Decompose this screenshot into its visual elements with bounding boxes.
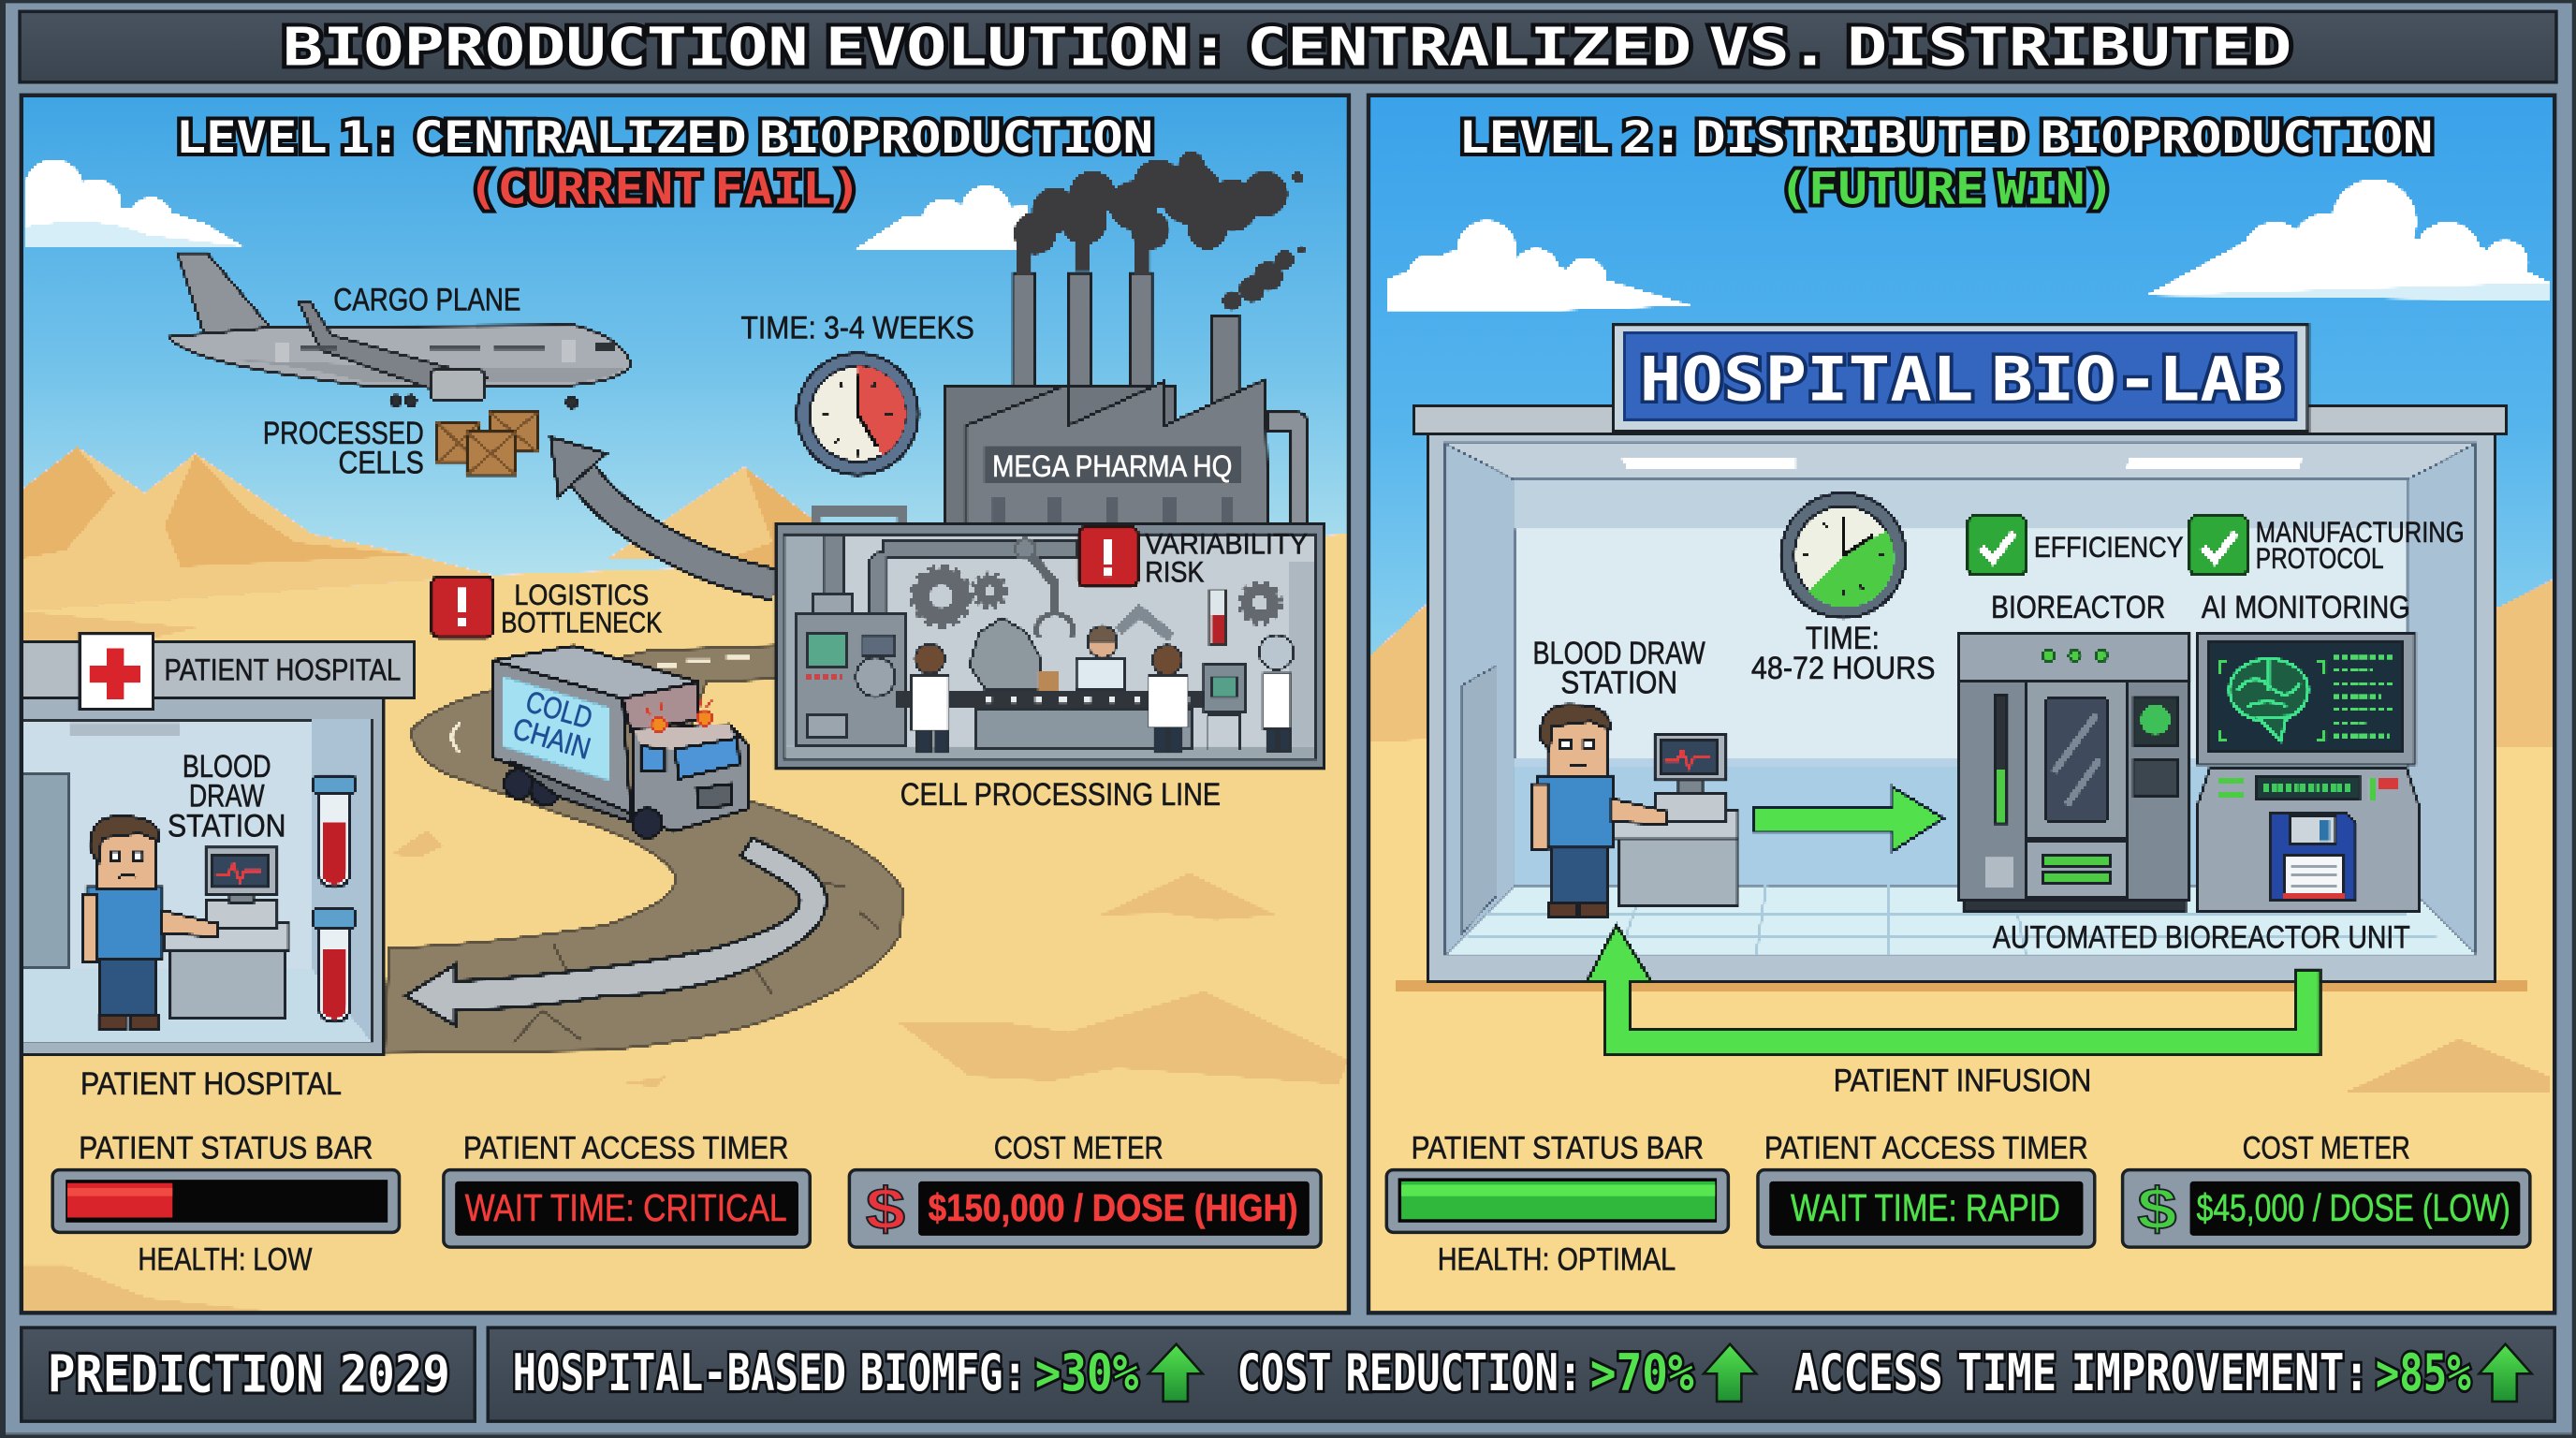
stat: access time improvement: ACCESS TIME IMPROVEMENT: — [1794, 1343, 2369, 1402]
cold chain panel — [503, 677, 609, 781]
label: manufacturing protocol: PROTOCOL — [2256, 541, 2384, 575]
level 2 labels — [1459, 112, 2465, 1098]
cost meter right — [2123, 1130, 2530, 1247]
cloud centre — [855, 185, 1038, 250]
stat: cost reduction: COST REDUCTION: — [1237, 1343, 1582, 1402]
door — [22, 774, 69, 968]
patient status bar left: PATIENT STATUS BAR — [79, 1130, 373, 1166]
patient access timer left — [444, 1130, 810, 1247]
label: blood draw station: DRAW — [189, 779, 265, 814]
label: blood draw station: BLOOD DRAW — [1533, 636, 1705, 671]
stat: hospital-based biomfg: HOSPITAL-BASED BIOMFG: — [513, 1343, 1027, 1402]
label: variability risk: RISK — [1145, 554, 1204, 588]
building shadow — [1397, 979, 2526, 992]
lights — [1621, 459, 1795, 470]
desk and monitor — [1610, 735, 1738, 905]
scene: level 1 centralized — [22, 95, 1349, 1313]
stat: hospital-based biomfg: >30% — [1035, 1343, 1138, 1402]
patient status bar right — [1386, 1130, 1728, 1278]
label: cargo plane: CARGO PLANE — [333, 283, 520, 318]
road — [385, 646, 903, 1053]
cargo box side — [493, 661, 631, 814]
sky — [22, 95, 1349, 588]
brain — [2230, 659, 2308, 741]
title bar — [20, 11, 2556, 82]
outer wall — [1427, 433, 2496, 981]
label: patient hospital: PATIENT HOSPITAL — [80, 1066, 342, 1102]
factory sign plate — [984, 446, 1242, 524]
bio-lab sign board — [1614, 326, 2308, 433]
arrow: patient infusion — [1587, 925, 2320, 1055]
truck — [493, 646, 749, 838]
cross badge — [79, 634, 153, 710]
label: blood draw station: BLOOD — [183, 749, 271, 785]
pipes — [813, 536, 1077, 614]
near dunes — [22, 829, 1349, 1312]
panel border — [22, 95, 1349, 1313]
prediction label: PREDICTION 2029 — [48, 1345, 450, 1404]
level 1 title: LEVEL 1: CENTRALIZED BIOPRODUCTION — [176, 112, 1153, 164]
label: mega pharma hq: MEGA PHARMA HQ — [992, 449, 1232, 483]
arrow: plane to processing — [550, 437, 775, 585]
conveyor belt — [896, 692, 1204, 708]
patient figure: healthy — [1533, 705, 1667, 917]
cargo box front — [622, 682, 698, 731]
desert ground — [22, 534, 1349, 1313]
cargo plane — [169, 253, 631, 408]
bioreactor unit — [1958, 633, 2190, 912]
patient access timer left: PATIENT ACCESS TIMER — [463, 1130, 788, 1166]
patient access timer left: WAIT TIME: CRITICAL — [465, 1186, 787, 1229]
level 2 title: LEVEL 2: DISTRIBUTED BIOPRODUCTION — [1459, 112, 2433, 164]
icon: clock with red wedge — [797, 353, 918, 475]
arrow: station to bioreactor — [1754, 787, 1943, 851]
machine — [797, 614, 906, 746]
level 2 subtitle: (FUTURE WIN) — [1779, 164, 2115, 215]
label: cold chain: COLD — [522, 684, 596, 735]
label: ai monitoring: AI MONITORING — [2202, 590, 2410, 625]
level 1 labels — [80, 112, 1308, 1102]
windshield — [675, 738, 739, 779]
ceiling — [1445, 444, 2476, 479]
prediction bar — [22, 1328, 475, 1421]
side dunes — [1368, 579, 2554, 748]
label: processed cells: PROCESSED — [263, 416, 424, 451]
label: bioreactor: BIOREACTOR — [1991, 590, 2165, 625]
far dunes — [22, 447, 953, 648]
stat: access time improvement: >85% — [2376, 1343, 2471, 1402]
cargo box top — [493, 646, 698, 698]
label: manufacturing protocol: MANUFACTURING — [2256, 515, 2465, 549]
sky — [1368, 95, 2554, 753]
label: logistics bottleneck — [501, 578, 662, 639]
gears — [914, 568, 1280, 624]
cell processing line — [775, 524, 1325, 769]
factory — [944, 272, 1308, 526]
cost meter left: $ — [866, 1177, 905, 1242]
cloud left — [24, 159, 243, 246]
rock sample — [970, 618, 1042, 690]
label: logistics bottleneck: LOGISTICS — [514, 578, 649, 611]
label: variability risk — [1145, 526, 1308, 588]
side window — [640, 746, 666, 770]
cab — [633, 725, 749, 831]
floor — [1445, 886, 2476, 955]
grille — [696, 784, 731, 809]
panel border — [1368, 95, 2554, 1313]
cost meter left — [849, 1130, 1321, 1247]
rear wheels — [505, 769, 560, 805]
desk and monitor — [165, 848, 289, 1019]
bottom dune — [2345, 1038, 2550, 1093]
label: blood draw station — [168, 749, 285, 844]
cloud — [1388, 220, 1692, 311]
label: time: TIME: — [1806, 621, 1880, 656]
cost meter left: COST METER — [994, 1130, 1164, 1166]
console — [2197, 769, 2420, 912]
label: processed cells: CELLS — [339, 445, 424, 480]
desert ground — [1368, 723, 2554, 1313]
icon: protocol check — [2190, 516, 2247, 575]
label: blood draw station: STATION — [168, 808, 285, 844]
patient status bar left: HEALTH: LOW — [138, 1242, 313, 1278]
patient access timer right: WAIT TIME: RAPID — [1791, 1186, 2060, 1229]
sign text: PATIENT HOSPITAL — [165, 653, 401, 687]
label: time: 48-72 HOURS — [1751, 651, 1936, 686]
robot arm with claw — [1016, 539, 1171, 638]
ai monitoring screen — [2197, 633, 2415, 764]
label: manufacturing protocol — [2256, 515, 2465, 575]
label: cold chain: CHAIN — [509, 712, 594, 766]
label: logistics bottleneck: BOTTLENECK — [501, 606, 662, 639]
label: blood draw station: STATION — [1560, 666, 1677, 701]
label: cell processing line: CELL PROCESSING LINE — [900, 777, 1221, 813]
sign — [22, 642, 414, 698]
icon: efficiency check — [1969, 516, 2026, 575]
label: cold chain — [509, 683, 603, 766]
label: automated bioreactor unit: AUTOMATED BIOREACTOR UNIT — [1993, 920, 2410, 956]
cloud — [2145, 179, 2550, 301]
interior — [1445, 444, 2476, 955]
brown bag — [1038, 670, 1058, 692]
cost meter right: $ — [2137, 1177, 2177, 1242]
label: variability risk: VARIABILITY — [1145, 526, 1308, 560]
door — [1462, 666, 1497, 933]
roof — [1414, 406, 2507, 433]
icon: clock with green wedge — [1781, 493, 1906, 618]
label: time — [1751, 621, 1936, 686]
hospital bio-lab building — [1414, 406, 2507, 981]
label: patient infusion: PATIENT INFUSION — [1834, 1063, 2091, 1098]
level 1 subtitle: (CURRENT FAIL) — [468, 164, 861, 215]
cost meter left: $150,000 / DOSE (HIGH) — [929, 1186, 1298, 1229]
patient status bar right: HEALTH: OPTIMAL — [1438, 1242, 1676, 1278]
front wheel — [633, 809, 662, 838]
back wall — [1515, 479, 2407, 886]
side console — [1204, 665, 1245, 749]
patient access timer right — [1758, 1130, 2095, 1247]
smoke — [1014, 151, 1305, 311]
processed cells crates — [437, 413, 537, 475]
chassis — [509, 761, 631, 822]
cost meter right: COST METER — [2243, 1130, 2410, 1166]
icon: blood tube — [314, 909, 355, 1022]
stats bar — [488, 1328, 2554, 1421]
beacons — [646, 698, 712, 732]
workers — [912, 626, 1294, 753]
icon: variability alert — [1078, 527, 1137, 587]
pipe handle over processing box — [816, 511, 902, 522]
patient status bar right: PATIENT STATUS BAR — [1412, 1130, 1704, 1166]
label: time: TIME: 3-4 WEEKS — [741, 311, 974, 346]
label: blood draw station — [1533, 636, 1705, 701]
label: efficiency: EFFICIENCY — [2034, 530, 2184, 564]
bio-lab sign text: HOSPITAL BIO-LAB — [1640, 345, 2284, 415]
patient status bar left — [52, 1130, 399, 1278]
title: BIOPRODUCTION EVOLUTION: CENTRALIZED VS. DISTRIBUTED — [283, 17, 2291, 78]
floppy disk — [2271, 814, 2356, 901]
icon: logistics alert — [432, 577, 493, 638]
conveyor base — [976, 708, 1191, 748]
stat: cost reduction: >70% — [1590, 1343, 1694, 1402]
test tube — [1210, 590, 1226, 644]
patient access timer right: PATIENT ACCESS TIMER — [1764, 1130, 2088, 1166]
icon: blood tube — [314, 775, 355, 888]
scene: level 2 distributed — [1368, 95, 2554, 1313]
arrow: return to hospital — [406, 838, 827, 1025]
patient hospital building — [22, 634, 414, 1055]
label: processed cells — [263, 416, 424, 480]
cab roof — [634, 725, 733, 749]
patient figure: unwell — [82, 816, 217, 1029]
